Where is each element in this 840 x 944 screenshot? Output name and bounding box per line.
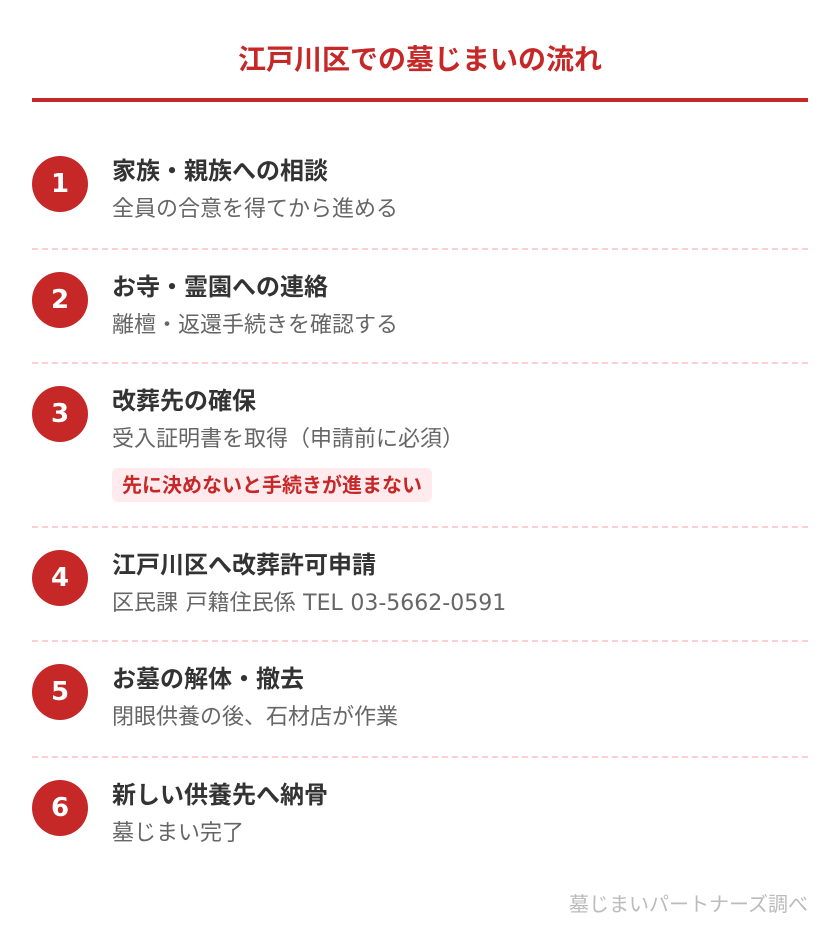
step 1 number badge: 1 (51, 169, 69, 199)
step 2 (32, 272, 398, 338)
step 6 number badge (32, 780, 88, 836)
step 3 number badge (32, 386, 88, 442)
title underline (32, 98, 808, 102)
step 6 number badge: 6 (51, 793, 69, 823)
step 4 heading: 江戸川区へ改葬許可申請 (112, 551, 376, 579)
step 5 number badge (32, 664, 88, 720)
step 1 description: 全員の合意を得てから進める (112, 197, 398, 222)
step 1 (32, 156, 398, 222)
step 4 (32, 550, 506, 616)
title: 江戸川区での墓じまいの流れ (238, 43, 602, 76)
step 1 number badge (32, 156, 88, 212)
step 6 description: 墓じまい完了 (112, 821, 244, 846)
step 5 description: 閉眼供養の後、石材店が作業 (112, 705, 398, 730)
step 3 heading: 改葬先の確保 (112, 387, 256, 415)
step 1 heading: 家族・親族への相談 (112, 157, 328, 185)
step 2 number badge (32, 272, 88, 328)
step 6 heading: 新しい供養先へ納骨 (112, 781, 328, 809)
step 6 (32, 780, 328, 846)
step 3 description: 受入証明書を取得（申請前に必須） (112, 427, 464, 452)
step 2 number badge: 2 (51, 285, 69, 315)
step 3 warning tag (112, 468, 432, 502)
step 4 number badge: 4 (51, 563, 69, 593)
step 2 description: 離檀・返還手続きを確認する (112, 313, 398, 338)
step 4 number badge (32, 550, 88, 606)
step 3 (32, 386, 464, 502)
source note: 墓じまいパートナーズ調べ (569, 892, 808, 916)
step 4 description: 区民課 戸籍住民係 TEL 03-5662-0591 (112, 591, 506, 616)
step 5 heading: お墓の解体・撤去 (112, 665, 304, 693)
step 5 (32, 664, 398, 730)
step 3 number badge: 3 (51, 399, 69, 429)
step 2 heading: お寺・霊園への連絡 (112, 273, 328, 301)
step 5 number badge: 5 (51, 677, 69, 707)
step 3 warning tag: 先に決めないと手続きが進まない (122, 473, 422, 497)
